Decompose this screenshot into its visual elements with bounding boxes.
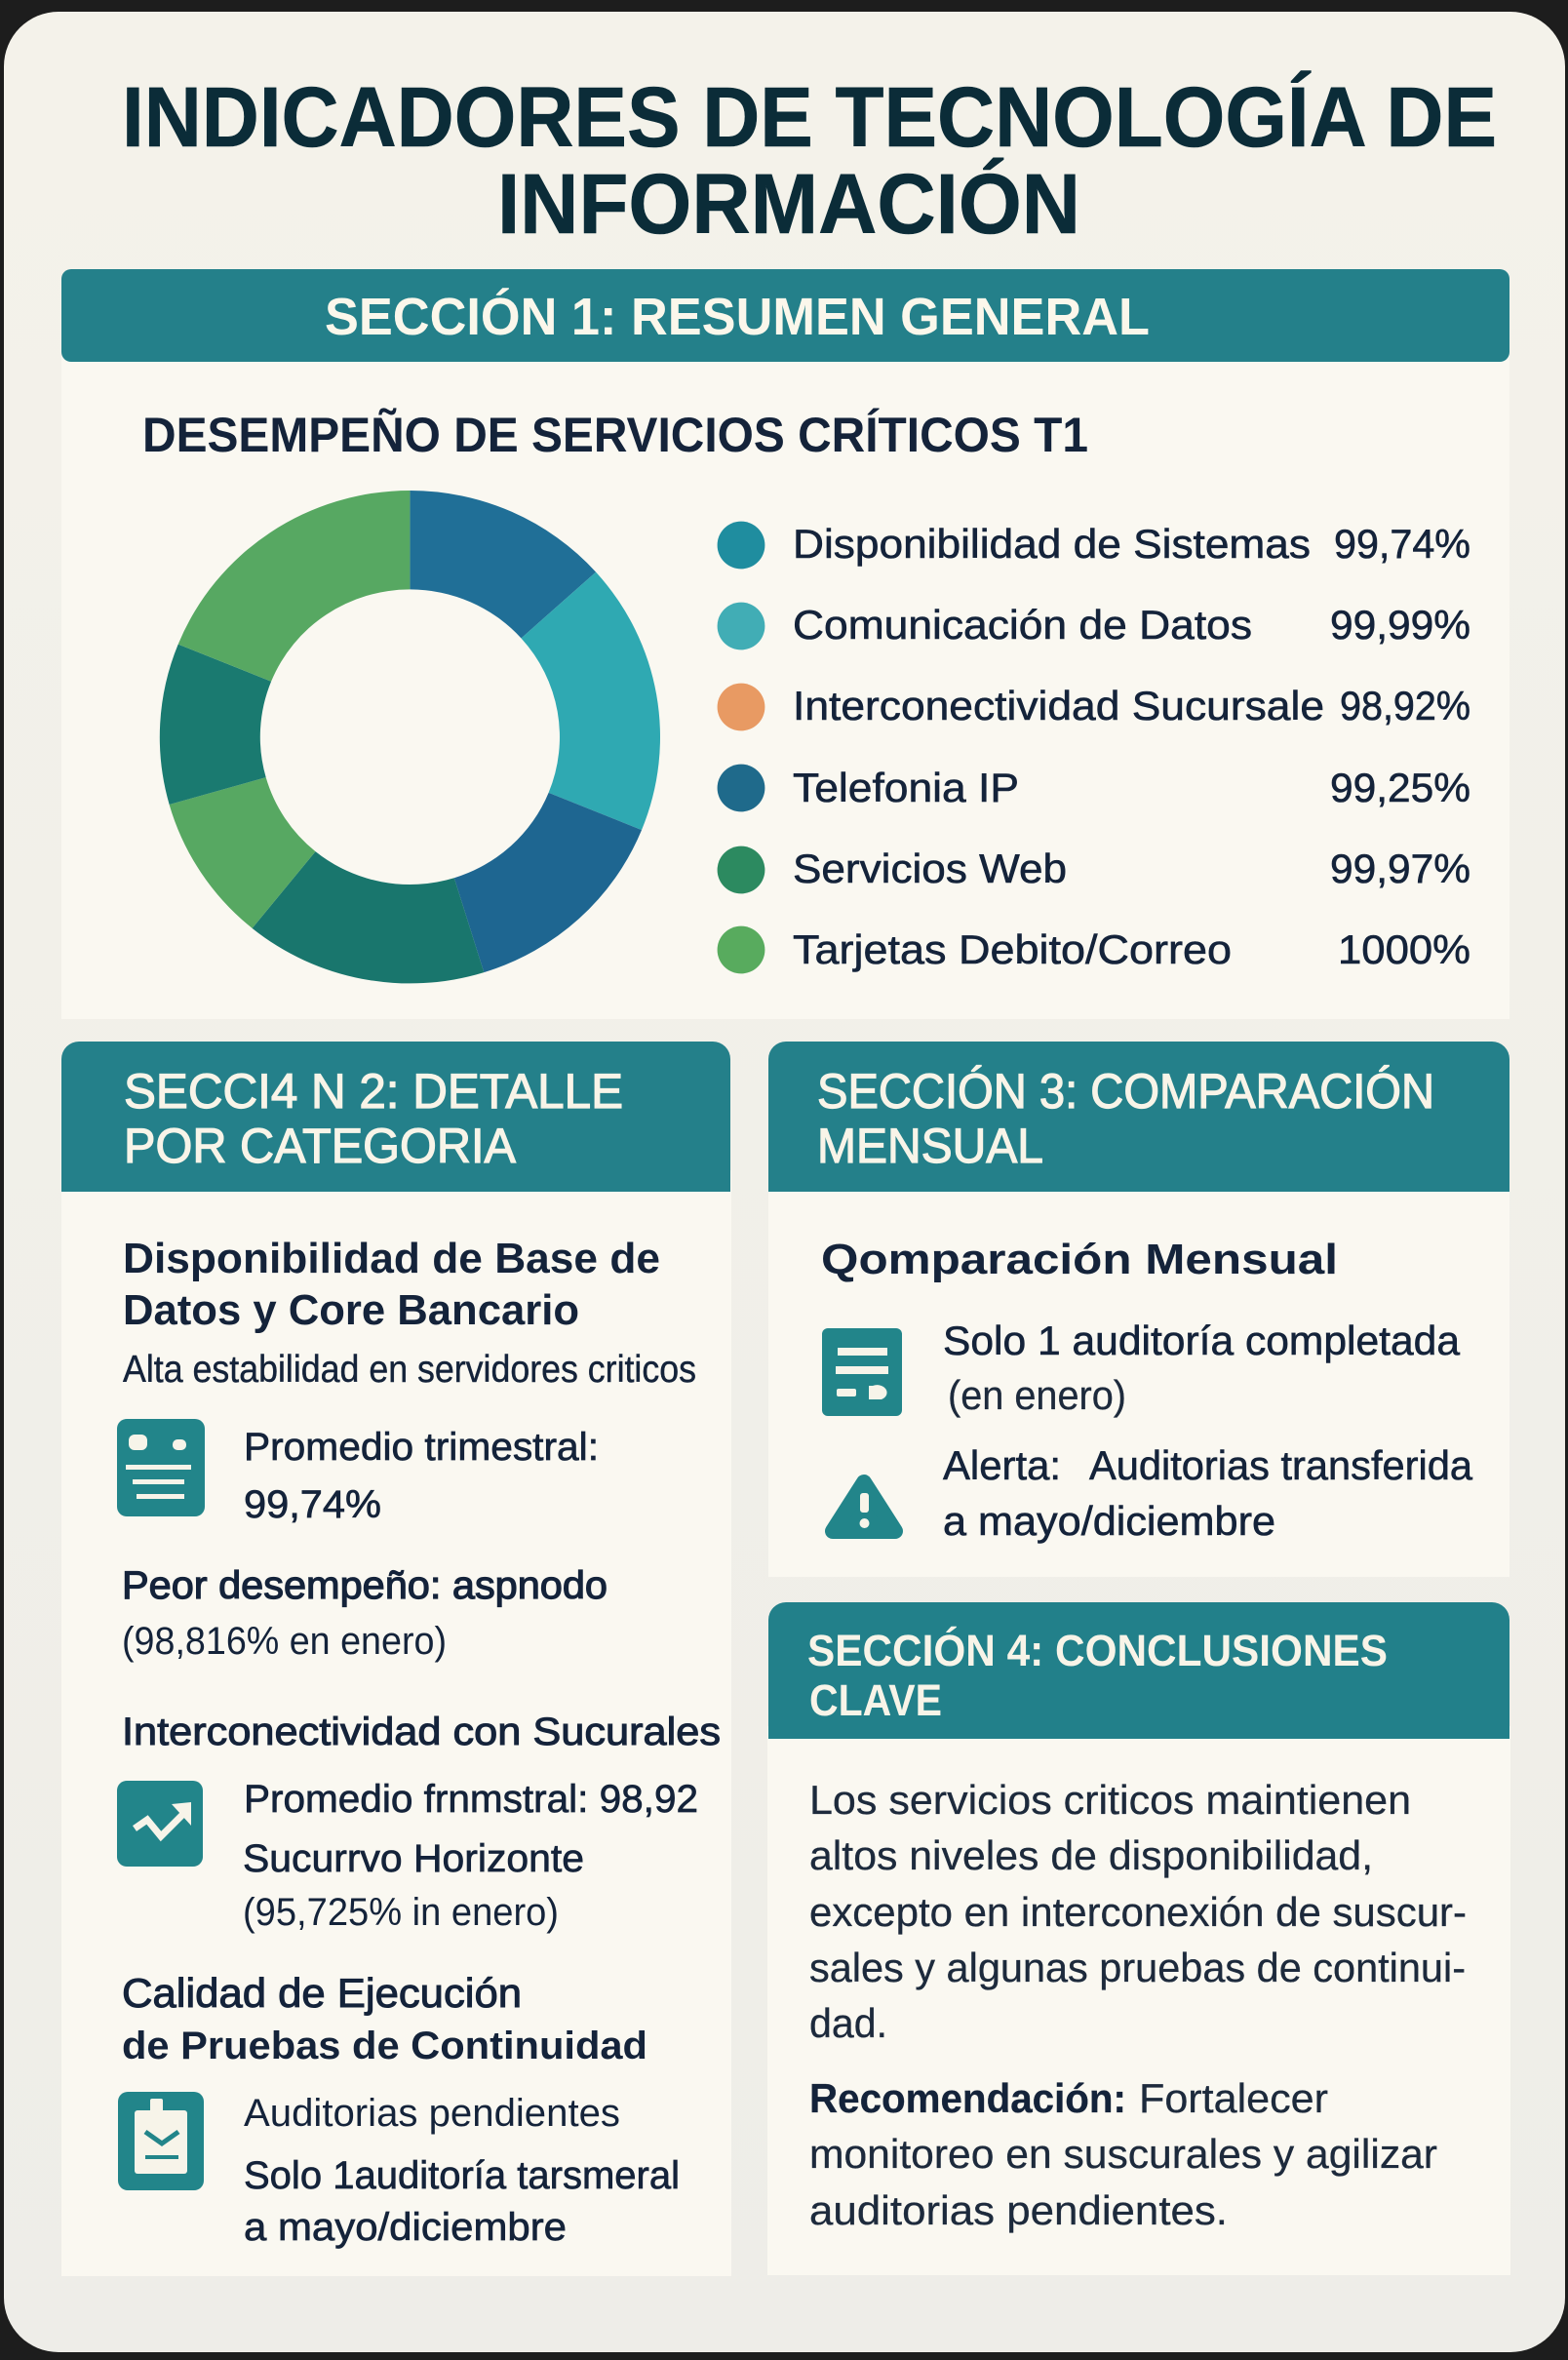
- section 1 header: [61, 269, 1509, 362]
- section 3 header: SECCIÓN 3: COMPARACIÓN: [817, 1064, 1434, 1119]
- conclusions text: [809, 1777, 1467, 2046]
- conclusions text: Los servicios criticos maintienen: [809, 1777, 1411, 1823]
- stat: promedio sucursal: (95,725% in enero): [243, 1891, 559, 1934]
- text: auditorías pendientes: a mayo/diciembre: [244, 2206, 567, 2249]
- stat: promedio sucursal: Promedio frnmstral: 98,92: [244, 1778, 698, 1821]
- donut chart: [160, 491, 660, 983]
- legend row: servicios web: [718, 846, 1470, 893]
- heading: disponibilidad: Disponibilidad de Base de: [123, 1235, 660, 1282]
- legend row: servicios web: Servicios Web: [793, 846, 1067, 891]
- heading: disponibilidad: Datos y Core Bancario: [123, 1286, 579, 1334]
- stat: promedio trimestral: 99,74%: [244, 1483, 381, 1526]
- heading: disponibilidad: [123, 1235, 660, 1334]
- icon: clipboard: [118, 2092, 204, 2190]
- text: alerta: Alerta:: [943, 1442, 1061, 1488]
- text: alerta: Auditorias transferida: [1089, 1442, 1473, 1488]
- heading: interconectividad: Interconectividad con Sucurales: [122, 1711, 721, 1753]
- section 1 header: SECCIÓN 1: RESUMEN GENERAL: [325, 288, 1150, 346]
- recommendation text: auditorias pendientes.: [809, 2187, 1228, 2233]
- icon: trend arrow: [117, 1781, 203, 1867]
- legend row: interconectividad: 98,92%: [1340, 683, 1470, 728]
- text: peor desempeño: (98,816% en enero): [122, 1620, 447, 1663]
- text: auditorías pendientes: Auditorias pendientes: [244, 2092, 620, 2135]
- section 4 header: CLAVE: [809, 1675, 942, 1725]
- panel: sección 1 resumen general: [61, 269, 1509, 1019]
- panel: sección 2 detalle por categoría: [61, 1042, 731, 2276]
- icon: document list: [117, 1419, 205, 1516]
- title: INFORMACIÓN: [497, 157, 1080, 252]
- legend row: tarjetas: 1000%: [1338, 926, 1470, 972]
- stat: promedio sucursal: [243, 1778, 698, 1934]
- legend: [718, 521, 1470, 973]
- legend row: telefonía: 99,25%: [1330, 765, 1470, 810]
- recommendation text: Recomendación:: [809, 2075, 1126, 2121]
- legend row: comunicación: Comunicación de Datos: [793, 602, 1252, 648]
- heading: calidad de ejecución: de Pruebas de Continuidad: [122, 2025, 647, 2067]
- legend row: tarjetas: Tarjetas Debito/Correo: [793, 926, 1232, 972]
- section 2 header: [61, 1042, 730, 1192]
- panel: sección 3 comparación mensual: [768, 1042, 1509, 1577]
- legend row: comunicación: 99,99%: [1330, 602, 1470, 648]
- section 4 header: [768, 1602, 1509, 1739]
- stat: promedio sucursal: Sucurrvo Horizonte: [243, 1837, 584, 1880]
- conclusions text: altos niveles de disponibilidad,: [809, 1832, 1373, 1878]
- conclusions text: sales y algunas pruebas de continui-: [809, 1945, 1466, 1990]
- title: INDICADORES DE TECNOLOGÍA DE: [122, 70, 1497, 165]
- heading: calidad de ejecución: Calidad de Ejecución: [122, 1970, 522, 2016]
- legend row: tarjetas: [718, 926, 1470, 973]
- conclusions text: excepto en interconexión de suscur-: [809, 1889, 1467, 1935]
- icon: report: [822, 1328, 902, 1416]
- section 2 header: POR CATEGORIA: [124, 1119, 517, 1173]
- section 3 header: [768, 1042, 1509, 1192]
- text: auditoría completada: [943, 1318, 1461, 1418]
- section 4 header: SECCIÓN 4: CONCLUSIONES: [807, 1626, 1388, 1675]
- legend row: interconectividad: [718, 683, 1470, 730]
- text: peor desempeño: [122, 1564, 608, 1663]
- legend row: telefonía: [718, 765, 1470, 811]
- legend row: telefonía: Telefonia IP: [793, 765, 1019, 810]
- heading: calidad de ejecución: [122, 1970, 647, 2067]
- text: peor desempeño: Peor desempeño: aspnodo: [122, 1564, 608, 1607]
- legend row: comunicación: [718, 602, 1470, 649]
- section 2 header: SECCI4 N 2: DETALLE: [124, 1064, 623, 1119]
- recommendation text: monitoreo en suscurales y agilizar: [809, 2131, 1437, 2177]
- section 3 header: MENSUAL: [817, 1119, 1043, 1173]
- text: auditorías pendientes: [244, 2092, 680, 2249]
- text: auditoría completada: (en enero): [948, 1372, 1126, 1418]
- conclusions text: dad.: [809, 2000, 887, 2046]
- text: alerta: [943, 1442, 1473, 1544]
- panel: sección 4 conclusiones clave: [767, 1602, 1510, 2275]
- stat: promedio trimestral: Promedio trimestral:: [244, 1426, 599, 1469]
- heading: comparación mensual: Qomparación Mensual: [821, 1236, 1338, 1283]
- subtitle: Alta estabilidad en servidores criticos: [123, 1349, 696, 1391]
- legend row: interconectividad: Interconectividad Sucursale: [793, 683, 1324, 728]
- legend row: disponibilidad: Disponibilidad de Sistemas: [793, 521, 1311, 567]
- legend row: servicios web: 99,97%: [1330, 846, 1470, 891]
- recommendation text: [809, 2075, 1437, 2233]
- legend row: disponibilidad: 99,74%: [1334, 521, 1470, 567]
- stat: promedio trimestral: [244, 1426, 599, 1526]
- text: auditorías pendientes: Solo 1auditoría tarsmeral: [244, 2154, 680, 2197]
- recommendation text: Fortalecer: [1139, 2075, 1328, 2121]
- text: auditoría completada: Solo 1 auditoría completada: [943, 1318, 1461, 1363]
- title: [122, 70, 1497, 252]
- text: alerta: a mayo/diciembre: [943, 1498, 1275, 1544]
- chart heading: DESEMPEÑO DE SERVICIOS CRÍTICOS T1: [142, 408, 1088, 462]
- icon: warning triangle: [833, 1482, 895, 1531]
- legend row: disponibilidad: [718, 521, 1470, 569]
